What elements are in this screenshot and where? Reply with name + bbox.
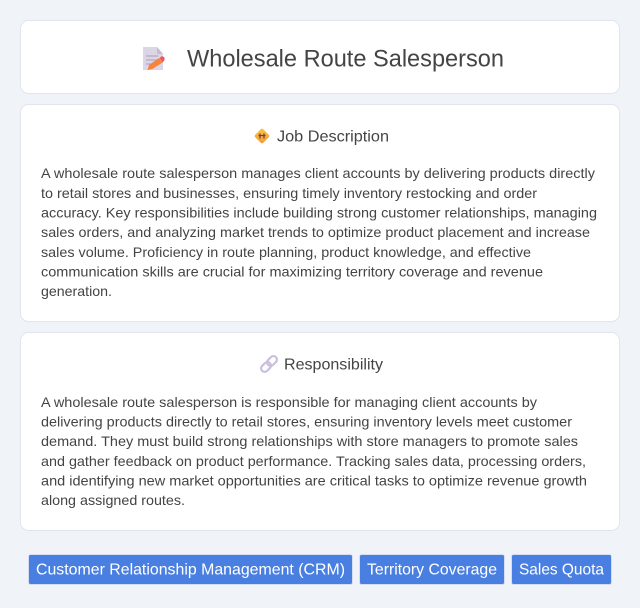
text block: responsibility paragraph: and gather feedback on product performance. Tracking sales data, processing orders, [41,453,586,469]
icon: road sign diamond [254,128,270,144]
tag: territory coverage [360,554,504,584]
text block: job description paragraph: sales orders, and analyzing market trends to optimize product placement and increase [41,224,590,240]
text block: job description paragraph [41,165,597,299]
text block: job description paragraph: generation. [41,283,112,299]
text block: responsibility paragraph: delivering products directly to retail stores, ensuring inventory levels meet customer [41,414,572,430]
text block: job description paragraph: to retail stores and businesses, ensuring timely inventory restocking and order [41,185,537,201]
text block: responsibility paragraph: along assigned routes. [41,492,185,508]
text block: responsibility paragraph: demand. They must build strong relationships with store managers to promote sales [41,433,578,449]
tag: sales quota [512,554,612,584]
text block: responsibility paragraph: A wholesale route salesperson is responsible for managing client accounts by [41,394,537,410]
tags row [28,554,612,584]
panel: responsibility [20,332,620,530]
tag: territory coverage: Territory Coverage [367,562,497,578]
text block: job description paragraph: sales volume. Proficiency in route planning, product knowledge, and effective [41,244,531,260]
heading: job description: Job Description [277,128,389,146]
text block: job description paragraph: accuracy. Key responsibilities include building strong customer relationships, managing [41,204,597,220]
text block: job description paragraph: A wholesale route salesperson manages client accounts by delivering products directly [41,165,595,181]
heading: title text: Wholesale Route Salesperson [187,46,504,72]
icon: link chain [260,355,278,373]
heading: responsibility: Responsibility [284,356,383,374]
panel: title [20,20,620,94]
text block: responsibility paragraph [41,394,587,508]
tag: CRM [28,554,352,584]
tag: CRM: Customer Relationship Management (CRM) [36,562,345,578]
panel: job description [20,104,620,322]
text block: responsibility paragraph: and identifying new market opportunities are critical tasks to optimize revenue growth [41,472,587,488]
icon: document with pencil [143,47,164,70]
text block: job description paragraph: communication skills are crucial for maximizing territory coverage and revenue [41,264,543,280]
tag: sales quota: Sales Quota [519,562,604,578]
